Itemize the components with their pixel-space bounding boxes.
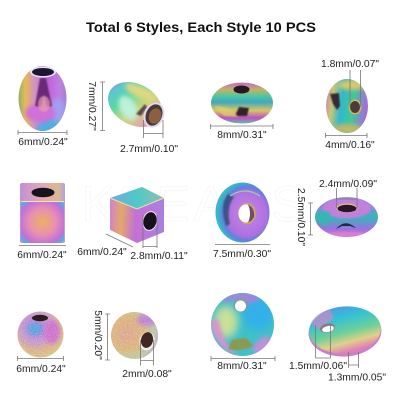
bead: coin front view xyxy=(211,292,274,357)
bead: cube front view xyxy=(20,183,65,243)
dimension: disc hole xyxy=(319,179,377,208)
dimension: cube hole xyxy=(130,215,188,262)
dimension: sphere width xyxy=(16,356,66,375)
dimension: sphere height xyxy=(92,310,110,360)
dimension: coin edge: 1.3mm/0.05" xyxy=(328,372,386,384)
dimension: coin width: 8mm/0.31" xyxy=(217,361,267,372)
dimension: rondelle thickness xyxy=(325,133,375,151)
dimension: oval hole: 2.7mm/0.10" xyxy=(120,144,178,155)
dimension: rondelle hole: 1.8mm/0.07" xyxy=(321,59,379,70)
bead: textured sphere side view xyxy=(110,311,159,360)
bead: textured sphere top view xyxy=(17,311,64,358)
dimension: disc thickness xyxy=(295,188,313,246)
dimension: oval width: 6mm/0.24" xyxy=(18,137,68,148)
dimension: coin edge xyxy=(328,352,386,384)
dimension: rondelle hole xyxy=(321,59,379,107)
bead: flat disc side view xyxy=(315,197,378,240)
dimension: disc thickness: 2.5mm/0.10" xyxy=(295,188,306,246)
title: Total 6 Styles, Each Style 10 PCS xyxy=(86,19,316,35)
dimension: cube hole: 2.8mm/0.11" xyxy=(130,251,188,262)
dimension: disc hole: 2.4mm/0.09" xyxy=(319,179,377,190)
dimension: oval width xyxy=(18,130,68,148)
dimension: oval height: 7mm/0.27" xyxy=(86,81,97,131)
dimension: oval height xyxy=(86,81,105,131)
dimension: coin width xyxy=(211,356,275,372)
dimension: sphere width: 6mm/0.24" xyxy=(16,364,66,375)
dimension: cube edge: 6mm/0.24" xyxy=(77,247,127,258)
dimension: rondelle width xyxy=(210,124,273,141)
bead: coin angled view xyxy=(307,304,383,359)
dimension: sphere hole xyxy=(122,340,172,380)
bead: oval angled view xyxy=(108,82,164,128)
watermark: KBEADS xyxy=(82,176,308,232)
dimension: rondelle width: 8mm/0.31" xyxy=(217,130,267,141)
dimension: coin hole: 1.5mm/0.06" xyxy=(289,361,347,372)
dimension: sphere hole: 2mm/0.08" xyxy=(122,369,172,380)
bead: rondelle angled view xyxy=(211,82,273,124)
bead: oval front view xyxy=(18,66,67,138)
dimension: cube front width: 6mm/0.24" xyxy=(17,250,67,261)
dimension: cube edge xyxy=(77,234,133,258)
dimension: oval hole xyxy=(120,120,178,155)
dimension: disc width: 7.5mm/0.30" xyxy=(213,249,271,260)
bead: flat disc front view xyxy=(216,182,270,242)
bead: cube angled view xyxy=(110,187,164,243)
dimension: coin hole xyxy=(289,325,347,372)
dimension: rondelle thickness: 4mm/0.16" xyxy=(325,140,375,151)
dimension: sphere height: 5mm/0.20" xyxy=(92,310,103,360)
bead: rondelle side view xyxy=(326,79,368,134)
